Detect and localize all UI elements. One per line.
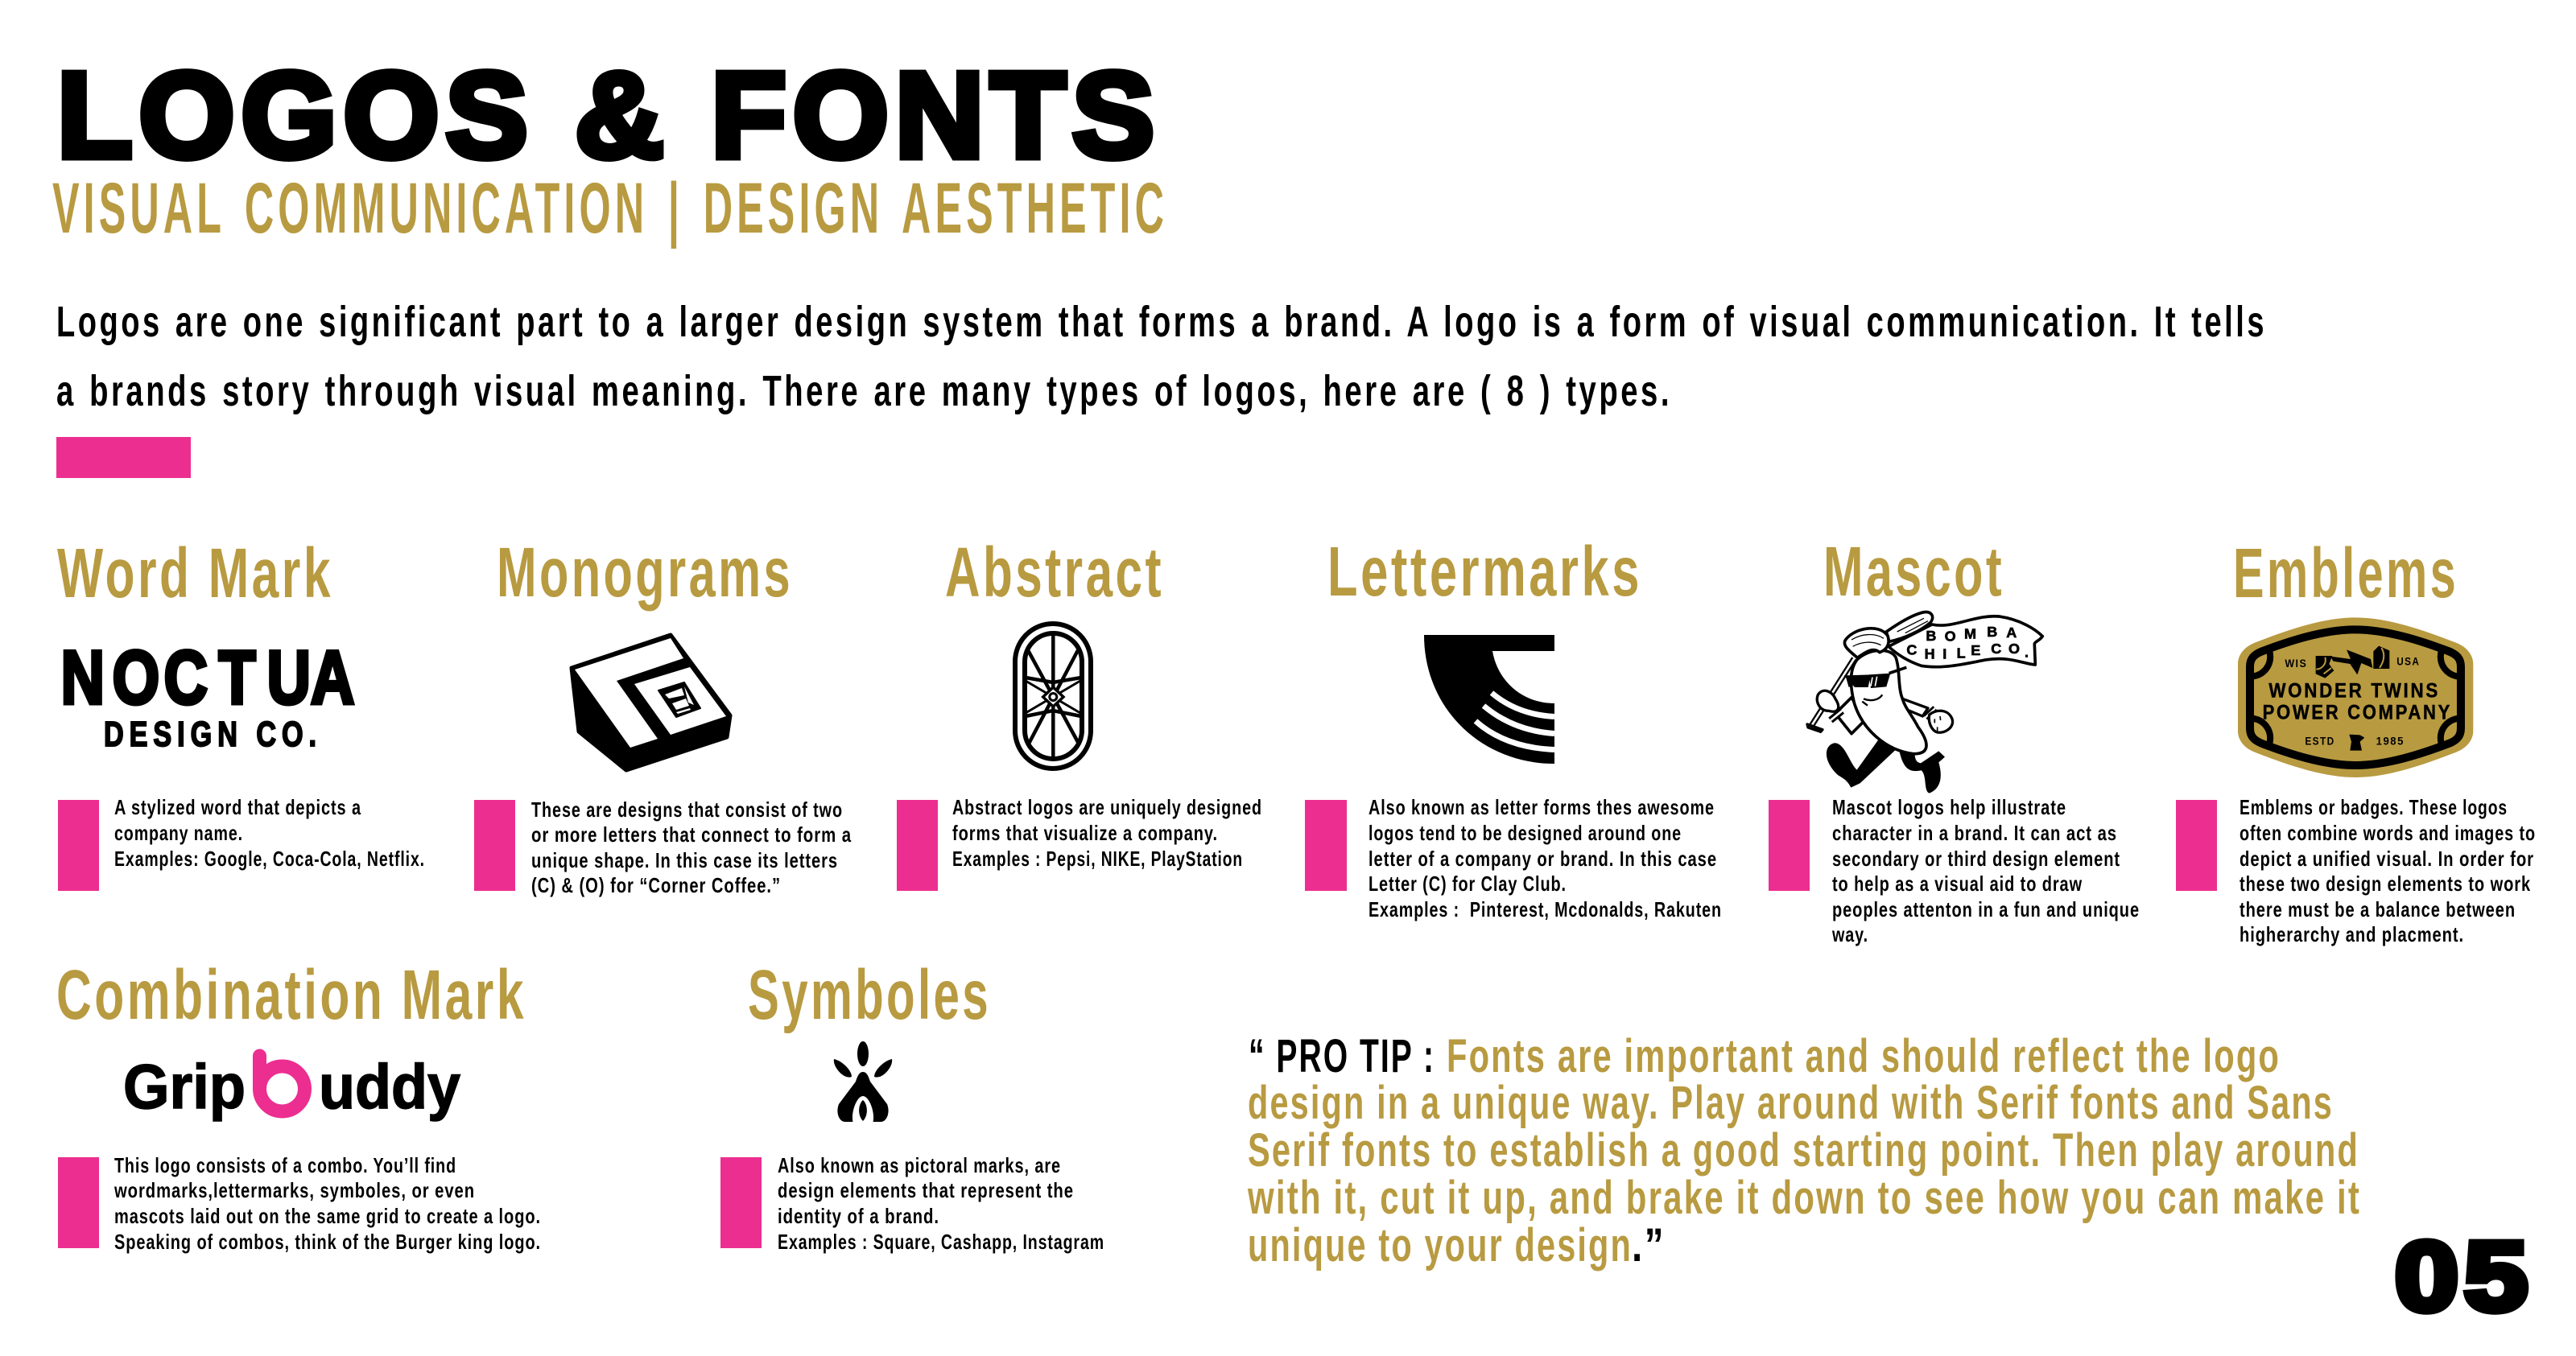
- panel: monograms: [474, 534, 852, 897]
- page number: 05: [2395, 1222, 2533, 1331]
- heading: abstract: Abstract: [945, 534, 1164, 612]
- marker bar: [720, 1157, 762, 1248]
- description: mascots laid out on the same grid to create a logo.: [114, 1204, 541, 1228]
- logo: Wonder Twins badge: ESTD: [2305, 735, 2335, 748]
- heading: word mark: Word Mark: [57, 534, 333, 612]
- marker bar: [2176, 800, 2217, 891]
- subtitle: VISUAL COMMUNICATION | DESIGN AESTHETIC: [52, 167, 1168, 249]
- description: Speaking of combos, think of the Burger king logo.: [114, 1230, 541, 1254]
- callout: pro tip: unique to your design: [1248, 1219, 1633, 1272]
- heading: mascot: Mascot: [1823, 533, 2004, 611]
- logo: GripBuddy: Grip: [123, 1051, 246, 1122]
- logo: Bomba Chile Co mascot: [1807, 612, 2042, 793]
- description: unique shape. In this case its letters: [531, 848, 838, 872]
- description: secondary or third design element: [1832, 847, 2120, 871]
- description: [531, 798, 852, 897]
- intro text: a brands story through visual meaning. There are many types of logos, here are ( 8 ) types.: [56, 367, 1672, 415]
- logo: Noctua: DESIGN CO.: [104, 715, 322, 754]
- logo: Noctua: NOCTUA: [61, 636, 354, 720]
- description: forms that visualize a company.: [952, 821, 1218, 845]
- logo: Wonder Twins badge: POWER COMPANY: [2263, 702, 2452, 723]
- description: identity of a brand.: [778, 1204, 939, 1228]
- heading: lettermarks: Lettermarks: [1327, 533, 1642, 611]
- description: A stylized word that depicts a: [114, 795, 361, 819]
- description: way.: [1831, 922, 1868, 946]
- panel: mascot: [1769, 533, 2140, 946]
- logo: flame symbol: [834, 1041, 892, 1123]
- description: This logo consists of a combo. You’ll find: [114, 1153, 456, 1177]
- description: Letter (C) for Clay Club.: [1368, 872, 1567, 896]
- description: Also known as letter forms thes awesome: [1368, 795, 1715, 819]
- title: LOGOS & FONTS: [57, 47, 1161, 183]
- description: These are designs that consist of two: [531, 798, 843, 822]
- logo: letter C: [1424, 635, 1554, 764]
- description: (C) & (O) for “Corner Coffee.”: [531, 873, 781, 897]
- marker bar: [58, 800, 99, 891]
- marker bar: [1305, 800, 1347, 891]
- description: character in a brand. It can act as: [1832, 821, 2117, 845]
- description: [114, 795, 425, 871]
- logo: Wonder Twins badge: [2238, 617, 2473, 777]
- logo: Wonder Twins badge: USA: [2396, 655, 2420, 668]
- heading: monograms: Monograms: [497, 534, 793, 612]
- description: [1831, 795, 2140, 946]
- logo: corner coffee monogram: [572, 635, 730, 770]
- description: peoples attenton in a fun and unique: [1832, 897, 2140, 921]
- description: letter of a company or brand. In this case: [1368, 847, 1717, 871]
- logo: abstract wheel: [1015, 624, 1091, 769]
- heading: emblems: Emblems: [2233, 534, 2458, 612]
- description: Examples : Pinterest, Mcdonalds, Rakuten: [1368, 897, 1722, 921]
- description: [1368, 795, 1722, 921]
- panel: symboles: [720, 956, 1104, 1254]
- description: Examples : Pepsi, NIKE, PlayStation: [952, 847, 1243, 871]
- logo: Wonder Twins badge: WONDER TWINS: [2268, 681, 2440, 703]
- description: logos tend to be designed around one: [1368, 821, 1682, 845]
- description: [778, 1153, 1104, 1254]
- marker bar: [58, 1157, 99, 1248]
- panel: abstract: [897, 534, 1262, 891]
- marker bar: [897, 800, 938, 891]
- description: [114, 1153, 541, 1254]
- logo: GripBuddy: uddy: [319, 1051, 460, 1122]
- panel: word mark: [57, 534, 425, 891]
- callout: pro tip: .”: [1632, 1219, 1666, 1272]
- description: Also known as pictoral marks, are: [778, 1153, 1061, 1177]
- intro text: [56, 298, 2267, 415]
- description: or more letters that connect to form a: [531, 822, 852, 847]
- panel: lettermarks: [1305, 533, 1722, 921]
- description: Examples: Google, Coca-Cola, Netflix.: [114, 847, 425, 871]
- pink accent bar: [56, 437, 191, 478]
- marker bar: [1769, 800, 1810, 891]
- callout: pro tip: “ PRO TIP :: [1249, 1030, 1435, 1082]
- panel: emblems: [2176, 534, 2536, 946]
- description: Mascot logos help illustrate: [1832, 795, 2066, 819]
- description: wordmarks,lettermarks, symboles, or even: [114, 1178, 475, 1202]
- callout: pro tip: [1247, 1030, 2361, 1272]
- description: Examples : Square, Cashapp, Instagram: [778, 1230, 1104, 1254]
- description: [2240, 795, 2536, 946]
- logo: Wonder Twins badge: 1985: [2376, 735, 2405, 748]
- description: to help as a visual aid to draw: [1832, 872, 2083, 896]
- description: design elements that represent the: [778, 1178, 1074, 1202]
- logo: Bomba Chile Co mascot: BOMBA: [1926, 624, 2017, 645]
- heading: symboles: Symboles: [748, 956, 991, 1034]
- logo: Bomba Chile Co mascot: CHILECO.: [1906, 641, 2029, 662]
- marker bar: [474, 800, 515, 891]
- logo: Wonder Twins badge: WIS: [2285, 657, 2307, 670]
- panel: combination mark: [56, 956, 541, 1254]
- description: company name.: [114, 821, 243, 845]
- description: [952, 795, 1262, 871]
- description: Abstract logos are uniquely designed: [952, 795, 1262, 819]
- heading: combination mark: Combination Mark: [56, 956, 526, 1034]
- description: higherarchy and placment.: [2240, 922, 2464, 946]
- logo: GripBuddy: [123, 1051, 460, 1122]
- callout: pro tip: Fonts are important and should reflect the logo: [1447, 1030, 2281, 1082]
